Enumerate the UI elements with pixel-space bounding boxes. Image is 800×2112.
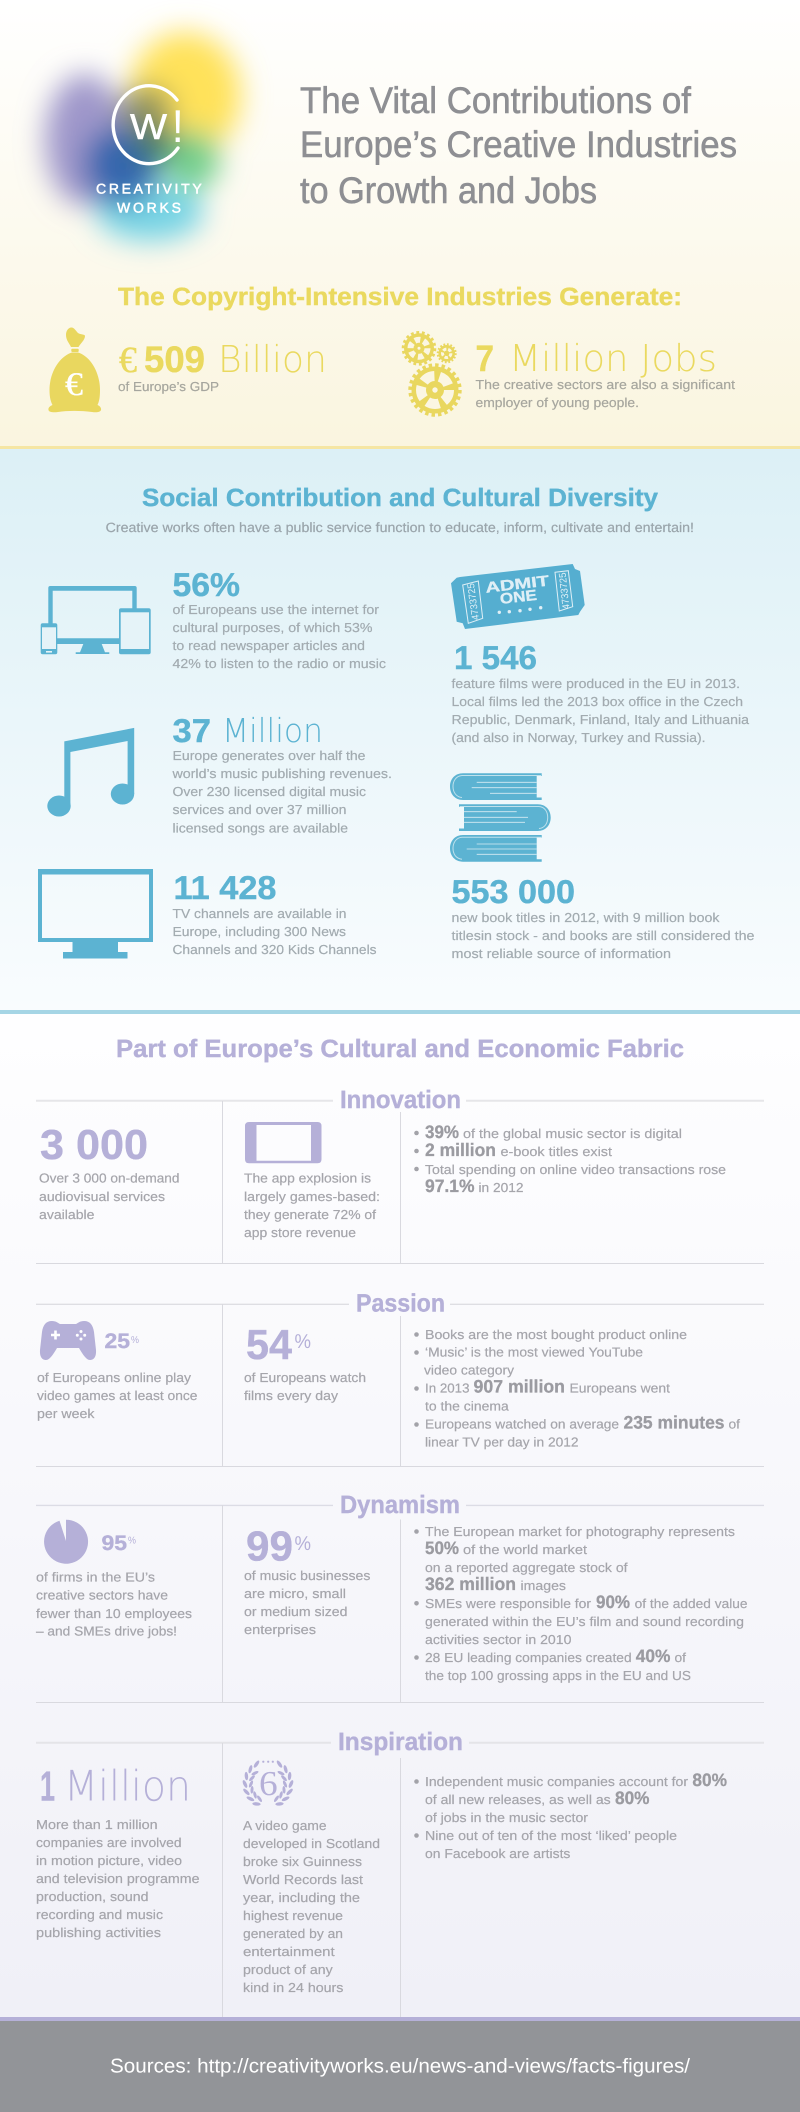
- bullets: dynamism: 40%: [636, 1646, 670, 1666]
- stat: 1 million: 1: [40, 1762, 55, 1809]
- bullets: dynamism: of: [674, 1650, 686, 1665]
- stat: 509 billion: [118, 338, 327, 394]
- stat: 3 000: 3 000: [40, 1121, 148, 1168]
- bullets: dynamism: generated within the EU’s film and sound recording: [425, 1614, 744, 1629]
- bullets: passion: ‘Music’ is the most viewed YouTube: [425, 1345, 643, 1360]
- stat: 95 percent: – and SMEs drive jobs!: [36, 1624, 177, 1639]
- section: innovation: [36, 1086, 764, 1264]
- stat: 3 000: [39, 1121, 180, 1222]
- bullets: dynamism: the top 100 grossing apps in the EU and US: [425, 1668, 691, 1683]
- icon: television: [38, 869, 153, 958]
- stat: 7 million jobs: The creative sectors are also a significant: [476, 377, 735, 392]
- stat: 99 percent: are micro, small: [244, 1586, 346, 1601]
- bullets: passion: linear TV per day in 2012: [425, 1435, 579, 1450]
- bullets: innovation: e-book titles exist: [500, 1144, 612, 1159]
- logo: creativity works: W: [130, 106, 167, 147]
- stat: 37 million: services and over 37 million: [172, 802, 346, 817]
- stat: 99 percent: %: [294, 1533, 311, 1555]
- heading: copyright-intensive industries: The Copyright-Intensive Industries Generate:: [118, 283, 682, 311]
- bullets: inspiration: on Facebook are artists: [425, 1846, 571, 1861]
- stat: 54 percent: films every day: [244, 1388, 339, 1403]
- stat: 25 percent: of Europeans online play: [37, 1370, 192, 1385]
- stat: 3 000: Over 3 000 on-demand: [39, 1171, 180, 1186]
- title: Europe’s Creative Industries: [300, 124, 737, 165]
- stat: 553 000: 553 000: [452, 873, 575, 910]
- logo: creativity works: CREATIVITY: [96, 180, 202, 196]
- stat: 1 546: 1 546: [454, 639, 537, 676]
- stat: 37 million: Over 230 licensed digital music: [172, 784, 367, 799]
- bullets: inspiration: of all new releases, as well as: [425, 1792, 611, 1807]
- bullets: passion: Books are the most bought product online: [425, 1327, 687, 1342]
- stat: 37 million: [171, 711, 392, 836]
- stat: 3 000: available: [39, 1207, 94, 1222]
- stat: 25 percent: [37, 1330, 198, 1421]
- stat: 1 million: production, sound: [36, 1889, 148, 1904]
- logo: creativity works: !: [172, 100, 184, 152]
- text: video game records: product of any: [243, 1962, 333, 1977]
- text: video game records: kind in 24 hours: [243, 1980, 344, 1995]
- icon: gears: [403, 333, 460, 414]
- stat: 25 percent: 25: [104, 1330, 130, 1353]
- stat: 95 percent: 95: [102, 1532, 127, 1555]
- bullets: passion: Europeans watched on average: [425, 1417, 619, 1432]
- icon: laurel with six: [242, 1760, 294, 1806]
- stat: 11 428: TV channels are available in: [172, 906, 346, 921]
- stat: 95 percent: [36, 1532, 193, 1639]
- heading: innovation: Innovation: [340, 1086, 461, 1114]
- logo: creativity works: WORKS: [117, 200, 181, 216]
- stat: 11 428: Channels and 320 Kids Channels: [172, 942, 377, 957]
- stat: 7 million jobs: 7: [476, 338, 494, 379]
- footer: sources: [0, 2017, 800, 2112]
- stat: 54 percent: %: [294, 1331, 311, 1353]
- bullets: passion: In 2013: [425, 1381, 470, 1396]
- bullets: inspiration: 80%: [615, 1788, 650, 1808]
- bullets: inspiration: 80%: [692, 1770, 727, 1790]
- icon: laurel with six: 6: [259, 1764, 278, 1803]
- text: video game records: A video game: [243, 1818, 326, 1833]
- text: video game records: World Records last: [243, 1872, 363, 1887]
- text: video game records: [243, 1818, 380, 1995]
- text: video game records: entertainment: [243, 1944, 335, 1959]
- stat: 553 000: most reliable source of information: [452, 946, 671, 961]
- panel: header: [0, 0, 800, 449]
- stat: 1 million: in motion picture, video: [36, 1853, 182, 1868]
- stat: 56 percent: of Europeans use the internet for: [172, 602, 380, 617]
- text: video game records: broke six Guinness: [243, 1854, 363, 1869]
- stat: 99 percent: of music businesses: [244, 1568, 371, 1583]
- bullets: passion: 907 million: [474, 1377, 565, 1397]
- stat: 1 million: Million: [64, 1761, 191, 1810]
- stat: 54 percent: 54: [246, 1321, 293, 1368]
- stat: 56 percent: cultural purposes, of which 53%: [172, 620, 373, 635]
- stat: 56 percent: [172, 566, 387, 671]
- text: app explosion: The app explosion is: [244, 1171, 372, 1186]
- stat: 25 percent: video games at least once: [37, 1388, 198, 1403]
- bullets: innovation: 2 million: [425, 1140, 496, 1160]
- stat: 1 million: companies are involved: [36, 1835, 182, 1850]
- stat: 25 percent: per week: [37, 1406, 95, 1421]
- stat: 37 million: Million: [222, 711, 323, 750]
- title: The Vital Contributions of: [300, 80, 692, 121]
- icon: pie chart 95 percent: [44, 1520, 88, 1564]
- panel: social contribution: [0, 449, 800, 1014]
- icon: admit one ticket: ONE: [499, 587, 538, 608]
- bullets: passion: Europeans went: [570, 1381, 670, 1396]
- stat: 56 percent: 56%: [172, 566, 240, 603]
- stat: 1 546: (and also in Norway, Turkey and Russia).: [452, 730, 706, 745]
- stat: 99 percent: or medium sized: [244, 1604, 348, 1619]
- panel: cultural and economic fabric: [0, 1014, 800, 2017]
- stat: 99 percent: [244, 1523, 371, 1637]
- stat: 1 million: recording and music: [36, 1907, 164, 1922]
- stat: 553 000: titlesin stock - and books are still considered the: [452, 928, 754, 943]
- stat: 1 million: and television programme: [36, 1871, 200, 1886]
- section: passion: [36, 1290, 764, 1466]
- logo: creativity works: [45, 32, 241, 241]
- stat: 509 billion: of Europe’s GDP: [118, 379, 219, 394]
- stat: 99 percent: 99: [246, 1523, 293, 1570]
- icon: admit one ticket: 4733725: [558, 571, 572, 610]
- stat: 1 546: Republic, Denmark, Finland, Italy and Lithuania: [452, 712, 750, 727]
- bullets: dynamism: 28 EU leading companies created: [425, 1650, 632, 1665]
- icon: music note: [47, 728, 134, 816]
- text: app explosion: app store revenue: [244, 1225, 356, 1240]
- stat: 1 546: [452, 639, 750, 745]
- bullets: innovation: [414, 1122, 726, 1196]
- icon: tablet: [245, 1122, 322, 1163]
- text: app explosion: [244, 1171, 380, 1240]
- stat: 509 billion: Billion: [218, 338, 327, 381]
- bullets: passion: of: [728, 1417, 740, 1432]
- heading: social contribution: Social Contribution and Cultural Diversity: [142, 484, 658, 512]
- stat: 54 percent: [244, 1321, 366, 1403]
- stat: 56 percent: 42% to listen to the radio or music: [172, 656, 387, 671]
- text: video game records: developed in Scotland: [243, 1836, 380, 1851]
- bullets: dynamism: of the world market: [463, 1542, 587, 1557]
- stat: 1 million: More than 1 million: [36, 1817, 158, 1832]
- text: app explosion: largely games-based:: [244, 1189, 380, 1204]
- bullets: innovation: Total spending on online video transactions rose: [425, 1162, 726, 1177]
- stat: 553 000: new book titles in 2012, with 9 million book: [452, 910, 720, 925]
- icon: admit one ticket: [451, 564, 585, 629]
- bullets: passion: video category: [424, 1363, 515, 1378]
- icon: admit one ticket: 4733725: [466, 582, 482, 621]
- bullets: innovation: in 2012: [478, 1180, 524, 1195]
- bullets: dynamism: 50%: [425, 1538, 459, 1558]
- bullets: innovation: of the global music sector is digital: [463, 1126, 682, 1141]
- footer: sources: Sources: http://creativityworks.eu/news-and-views/facts-figures/: [110, 2056, 690, 2078]
- stat: 509 billion: €: [119, 340, 137, 381]
- bullets: inspiration: Independent music companies account for: [425, 1774, 689, 1789]
- bullets: dynamism: images: [520, 1578, 567, 1593]
- heading: passion: Passion: [356, 1290, 445, 1318]
- icon: money bag: €: [65, 367, 83, 403]
- bullets: dynamism: of the added value: [635, 1596, 748, 1611]
- bullets: passion: 235 minutes: [624, 1413, 724, 1433]
- stat: 1 million: publishing activities: [36, 1925, 162, 1940]
- bullets: inspiration: [414, 1770, 727, 1861]
- subheading: Creative works often have a public service function to educate, inform, cultivate and entertain!: [106, 520, 694, 535]
- stat: 11 428: [172, 869, 377, 957]
- bullets: passion: to the cinema: [425, 1399, 510, 1414]
- stat: 37 million: licensed songs are available: [172, 820, 348, 836]
- title: [300, 80, 737, 211]
- stat: 7 million jobs: Million Jobs: [509, 337, 717, 380]
- text: app explosion: they generate 72% of: [244, 1207, 376, 1222]
- stat: 11 428: 11 428: [174, 869, 276, 906]
- heading: dynamism: Dynamism: [340, 1491, 460, 1519]
- bullets: dynamism: The European market for photography represents: [425, 1524, 736, 1539]
- stat: 7 million jobs: employer of young people.: [476, 395, 639, 410]
- stat: 95 percent: %: [128, 1536, 136, 1547]
- bullets: inspiration: of jobs in the music sector: [425, 1810, 589, 1825]
- bullets: dynamism: activities sector in 2010: [425, 1632, 571, 1647]
- section: inspiration: [36, 1728, 764, 2017]
- stat: 553 000: [452, 873, 754, 961]
- icon: money bag: [48, 327, 101, 412]
- stat: 54 percent: of Europeans watch: [244, 1370, 366, 1385]
- section: dynamism: [36, 1491, 764, 1702]
- stat: 95 percent: fewer than 10 employees: [36, 1606, 193, 1621]
- stat: 1 million: [36, 1761, 200, 1940]
- icon: devices: [41, 586, 151, 654]
- bullets: dynamism: 90%: [596, 1592, 630, 1612]
- stat: 11 428: Europe, including 300 News: [172, 924, 347, 939]
- bullets: dynamism: 362 million: [425, 1574, 516, 1594]
- stat: 3 000: audiovisual services: [39, 1189, 166, 1204]
- stat: 95 percent: of firms in the EU’s: [36, 1570, 156, 1585]
- heading: inspiration: Inspiration: [338, 1728, 463, 1756]
- icon: books: [450, 773, 551, 862]
- stat: 37 million: world’s music publishing revenues.: [171, 766, 392, 781]
- bullets: passion: [414, 1327, 740, 1450]
- stat: 1 546: Local films led the 2013 box office in the Czech: [452, 694, 743, 709]
- heading: cultural and economic fabric: Part of Europe’s Cultural and Economic Fabric: [116, 1035, 684, 1063]
- stat: 56 percent: to read newspaper articles and: [172, 638, 365, 653]
- stat: 509 billion: 509: [144, 339, 205, 380]
- stat: 95 percent: creative sectors have: [36, 1588, 168, 1603]
- text: video game records: highest revenue: [243, 1908, 343, 1923]
- bullets: innovation: 39%: [425, 1122, 459, 1142]
- stat: 7 million jobs: [476, 337, 735, 410]
- text: video game records: year, including the: [243, 1890, 360, 1905]
- bullets: dynamism: SMEs were responsible for: [425, 1596, 592, 1611]
- icon: admit one ticket: ADMIT: [485, 573, 550, 597]
- stat: 99 percent: enterprises: [244, 1622, 317, 1637]
- bullets: innovation: 97.1%: [425, 1176, 474, 1196]
- bullets: inspiration: Nine out of ten of the most ‘liked’ people: [425, 1828, 677, 1843]
- stat: 37 million: Europe generates over half the: [172, 748, 366, 763]
- bullets: dynamism: on a reported aggregate stock of: [425, 1560, 628, 1575]
- stat: 25 percent: %: [131, 1335, 139, 1346]
- stat: 1 546: feature films were produced in the EU in 2013.: [452, 676, 740, 691]
- icon: game controller: [40, 1321, 96, 1360]
- title: to Growth and Jobs: [300, 170, 597, 211]
- text: video game records: generated by an: [243, 1926, 343, 1941]
- stat: 37 million: 37: [172, 712, 211, 749]
- bullets: dynamism: [414, 1524, 748, 1683]
